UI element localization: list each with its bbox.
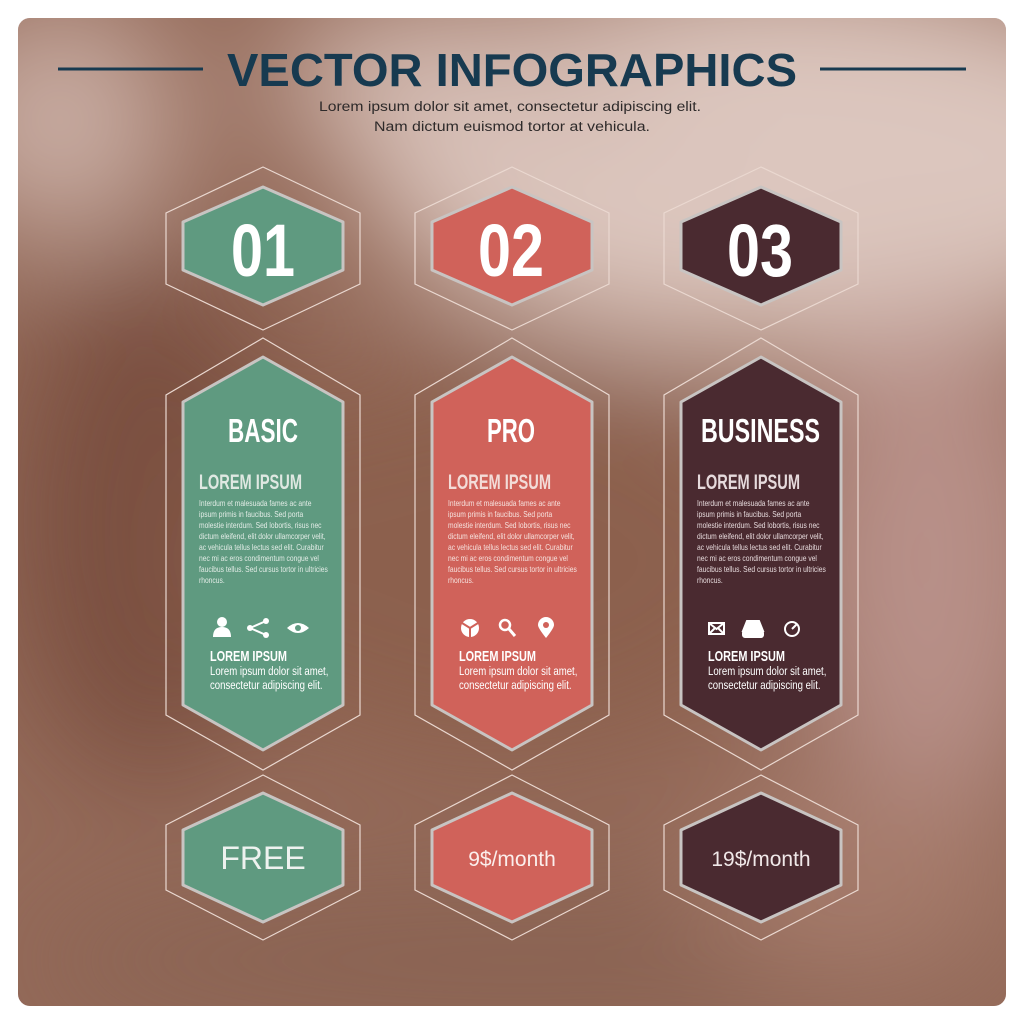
plan card pro: Interdum et malesuada fames ac ante bbox=[448, 498, 560, 508]
plan card business: Lorem ipsum dolor sit amet, bbox=[708, 665, 826, 678]
plan card pro: nec mi ac eros condimentum congue vel bbox=[448, 553, 568, 563]
plan card pro: dictum eleifend, elit dolor ullamcorper velit, bbox=[448, 531, 575, 541]
plan card basic: BASIC bbox=[228, 412, 298, 449]
plan card business: consectetur adipiscing elit. bbox=[708, 679, 821, 692]
column 1: basic bbox=[166, 167, 360, 940]
plan card pro: molestie interdum. Sed lobortis, risus nec bbox=[448, 520, 571, 530]
price 9$/month bbox=[415, 775, 609, 940]
title: VECTOR INFOGRAPHICS bbox=[227, 44, 797, 96]
subtitle bbox=[319, 99, 701, 134]
plan card basic: molestie interdum. Sed lobortis, risus nec bbox=[199, 520, 322, 530]
plan card basic bbox=[166, 338, 360, 770]
plan card pro: LOREM IPSUM bbox=[448, 471, 551, 494]
plan card business: ac vehicula tellus lectus sed elit. Curabitur bbox=[697, 542, 822, 552]
plan card business: nec mi ac eros condimentum congue vel bbox=[697, 553, 817, 563]
price 19$/month bbox=[664, 775, 858, 940]
plan card business: dictum eleifend, elit dolor ullamcorper velit, bbox=[697, 531, 824, 541]
price free bbox=[166, 775, 360, 940]
price 19$/month: 19$/month bbox=[711, 848, 811, 871]
plan card basic: LOREM IPSUM bbox=[199, 471, 302, 494]
plan card basic: nec mi ac eros condimentum congue vel bbox=[199, 553, 319, 563]
plan card pro: LOREM IPSUM bbox=[459, 648, 536, 665]
subtitle: Lorem ipsum dolor sit amet, consectetur adipiscing elit. bbox=[319, 99, 701, 114]
plan card basic: faucibus tellus. Sed cursus tortor in ultricies bbox=[199, 564, 328, 574]
number badge 03: 03 bbox=[727, 209, 793, 292]
plan card business: LOREM IPSUM bbox=[697, 471, 800, 494]
plan card pro: faucibus tellus. Sed cursus tortor in ultricies bbox=[448, 564, 577, 574]
plan card basic: consectetur adipiscing elit. bbox=[210, 679, 323, 692]
price 9$/month: 9$/month bbox=[468, 848, 556, 871]
plan card basic: rhoncus. bbox=[199, 575, 225, 585]
plan card business: molestie interdum. Sed lobortis, risus nec bbox=[697, 520, 820, 530]
plan card pro: rhoncus. bbox=[448, 575, 474, 585]
plan card business bbox=[664, 338, 858, 770]
plan card business: BUSINESS bbox=[701, 412, 820, 449]
column 2: pro bbox=[415, 167, 609, 940]
plan card basic: dictum eleifend, elit dolor ullamcorper velit, bbox=[199, 531, 326, 541]
number badge 01: 01 bbox=[231, 209, 295, 292]
plan card basic: LOREM IPSUM bbox=[210, 648, 287, 665]
plan card basic: Lorem ipsum dolor sit amet, bbox=[210, 665, 328, 678]
plan card pro: consectetur adipiscing elit. bbox=[459, 679, 572, 692]
icons: mail, drive, gauge bbox=[709, 621, 799, 637]
plan card pro: Lorem ipsum dolor sit amet, bbox=[459, 665, 577, 678]
plan card pro bbox=[415, 338, 609, 770]
number badge 02: 02 bbox=[478, 209, 544, 292]
plan card pro: ipsum primis in faucibus. Sed porta bbox=[448, 509, 553, 519]
number badge 03 bbox=[664, 167, 858, 330]
plan card pro: PRO bbox=[487, 412, 535, 449]
plan card business: LOREM IPSUM bbox=[708, 648, 785, 665]
icons: cube, search, pin bbox=[461, 617, 554, 638]
subtitle: Nam dictum euismod tortor at vehicula. bbox=[374, 119, 650, 134]
column 3: business bbox=[664, 167, 858, 940]
plan card pro: ac vehicula tellus lectus sed elit. Curabitur bbox=[448, 542, 573, 552]
plan card basic: Interdum et malesuada fames ac ante bbox=[199, 498, 311, 508]
plan card business: Interdum et malesuada fames ac ante bbox=[697, 498, 809, 508]
plan card basic: ipsum primis in faucibus. Sed porta bbox=[199, 509, 304, 519]
number badge 01 bbox=[166, 167, 360, 330]
plan card business: rhoncus. bbox=[697, 575, 723, 585]
plan card basic: ac vehicula tellus lectus sed elit. Curabitur bbox=[199, 542, 324, 552]
plan card business: faucibus tellus. Sed cursus tortor in ultricies bbox=[697, 564, 826, 574]
icons: user, share, eye bbox=[213, 617, 309, 638]
number badge 02 bbox=[415, 167, 609, 330]
plan card business: ipsum primis in faucibus. Sed porta bbox=[697, 509, 802, 519]
price free: FREE bbox=[220, 840, 306, 876]
